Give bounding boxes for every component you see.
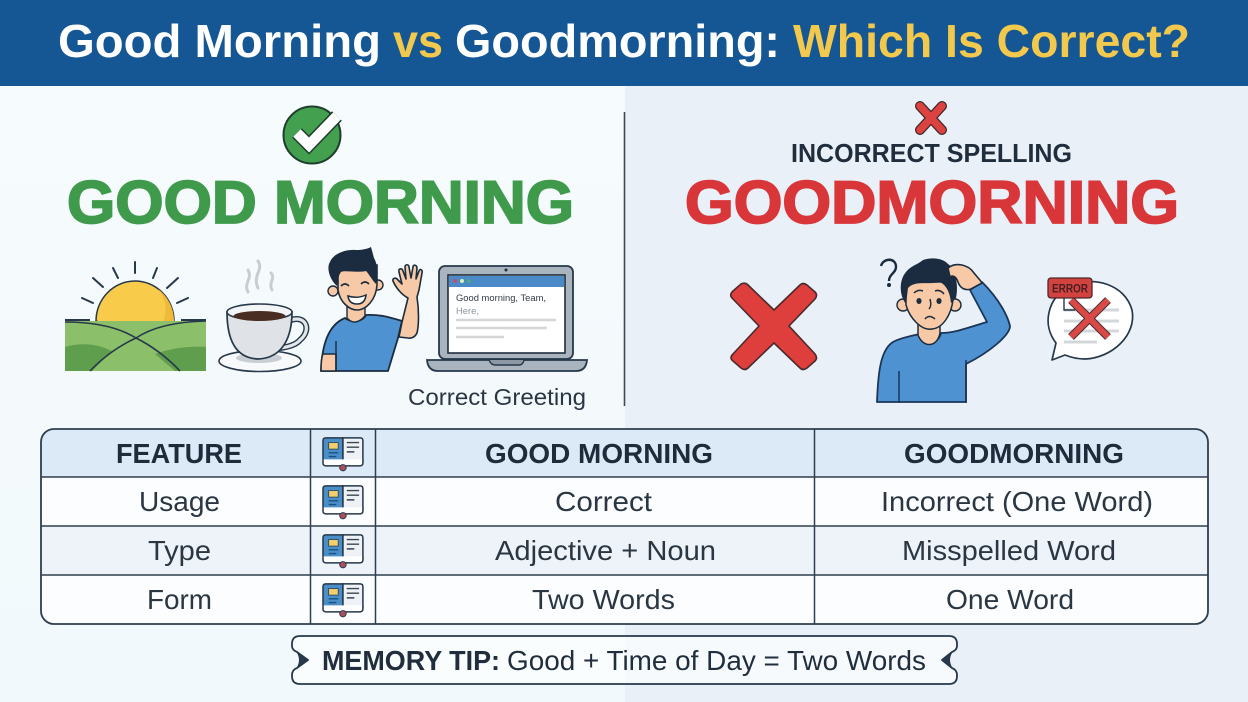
- table row: usage: Incorrect (One Word): [881, 486, 1153, 517]
- icon: error speech bubble: [1048, 278, 1133, 360]
- icon: green check mark: [284, 106, 340, 164]
- table row: usage: Usage: [139, 486, 220, 517]
- icon: laptop with email: Good morning, Team,: [456, 293, 546, 304]
- memory tip banner: Good + Time of Day = Two Words: [507, 645, 926, 676]
- title banner: vs: [393, 15, 443, 67]
- table header row: FEATURE: [116, 438, 242, 469]
- table header row: [116, 438, 1124, 469]
- icon: laptop with email: Here,: [456, 306, 479, 317]
- icon: error speech bubble: ERROR: [1052, 284, 1089, 296]
- title banner: [0, 0, 1248, 86]
- table header row: GOODMORNING: [904, 438, 1124, 469]
- table row: form: One Word: [946, 584, 1074, 615]
- table row: type: Misspelled Word: [902, 535, 1116, 566]
- table row: type: [148, 535, 1116, 566]
- table row: form: Form: [147, 584, 212, 615]
- icon: book form: [323, 584, 363, 617]
- memory tip banner: MEMORY TIP:: [322, 645, 500, 676]
- table row: form: [147, 584, 1074, 615]
- icon: small red x: [920, 106, 942, 130]
- table header row: GOOD MORNING: [485, 438, 713, 469]
- heading: goodmorning: GOODMORNING: [685, 168, 1179, 236]
- table row: form: Two Words: [532, 584, 675, 615]
- icon: book header: [323, 438, 363, 471]
- table row: usage: Correct: [555, 486, 652, 517]
- icon: laptop with email: [427, 266, 587, 371]
- caption: correct greeting: Correct Greeting: [408, 384, 586, 410]
- icon: book usage: [323, 486, 363, 519]
- icon: book type: [323, 535, 363, 568]
- table row: type: Type: [148, 535, 211, 566]
- table row: type: Adjective + Noun: [495, 535, 716, 566]
- divider: [624, 112, 626, 406]
- icon: large red x: [731, 283, 816, 370]
- heading: good morning: GOOD MORNING: [67, 169, 574, 236]
- icon: coffee cup with steam: [219, 261, 306, 372]
- title banner: Goodmorning:: [455, 15, 780, 67]
- comparison table: [41, 429, 1208, 624]
- panel: correct form: [65, 106, 587, 410]
- background: right panel: [625, 86, 1248, 702]
- icon: sunrise over hills: [65, 262, 206, 371]
- memory tip banner: [292, 636, 957, 684]
- icon: confused man: [877, 258, 1010, 403]
- title banner: Which Is Correct?: [793, 15, 1190, 67]
- icon: waving man: [321, 247, 422, 371]
- label: incorrect spelling: INCORRECT SPELLING: [791, 140, 1072, 168]
- table row: usage: [139, 486, 1153, 517]
- panel: incorrect form: [685, 106, 1179, 403]
- title banner: Good Morning: [58, 15, 381, 67]
- background: left panel: [0, 86, 625, 702]
